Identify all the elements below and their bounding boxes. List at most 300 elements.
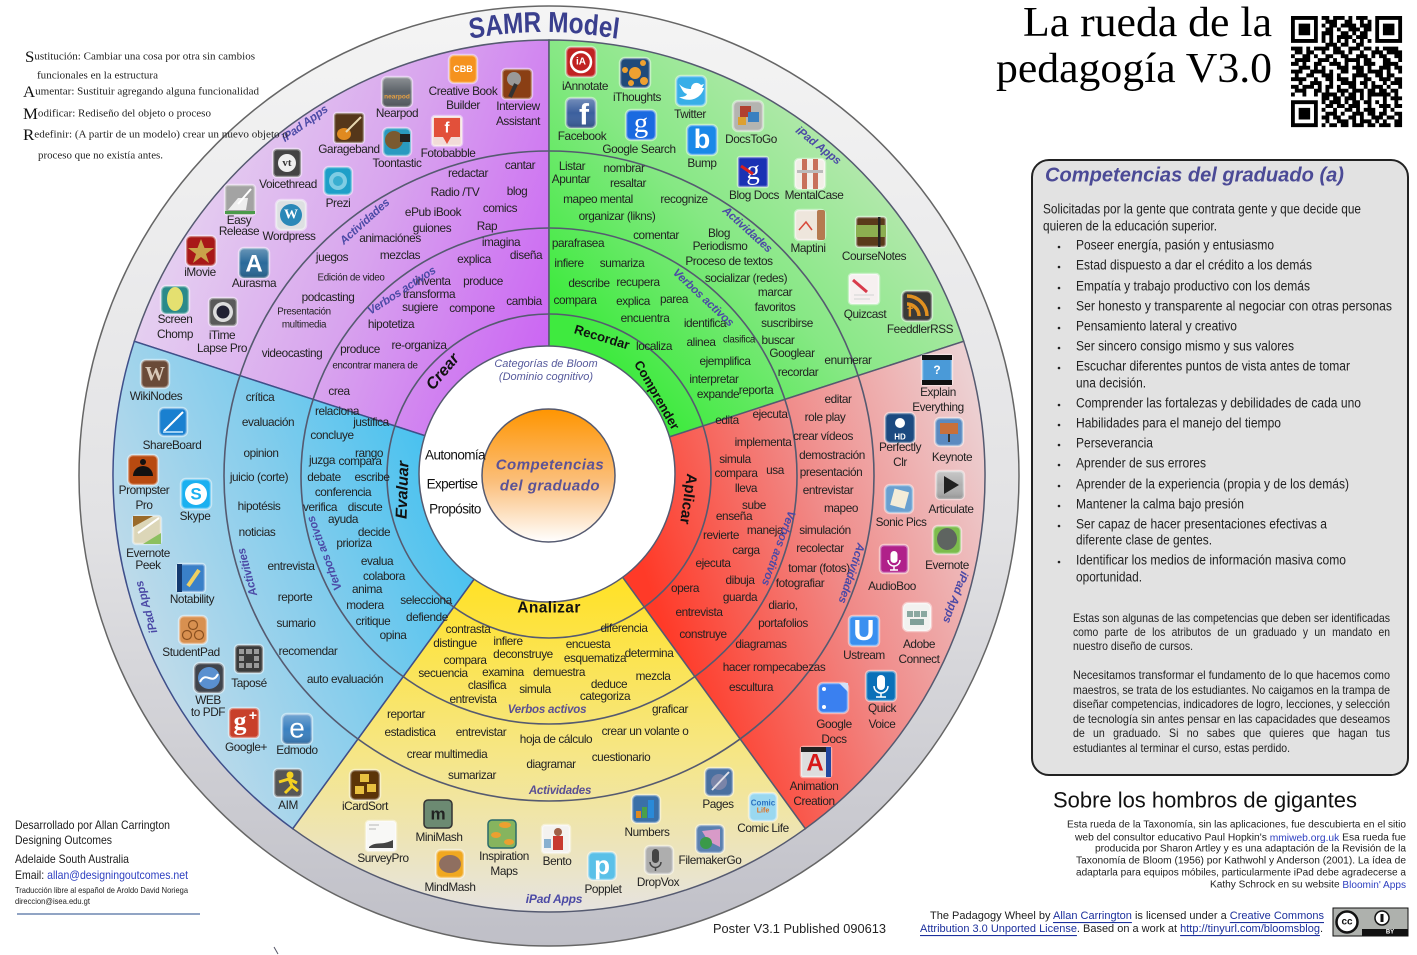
ring labels: green: iPad Apps xyxy=(793,125,843,167)
active verbs: purple: diseña xyxy=(510,248,543,262)
SAMR legend: Modificar: Rediseño del objeto o proceso xyxy=(23,106,211,122)
active verbs: green: sumariza xyxy=(600,256,645,270)
icon: Easy Release: Release xyxy=(219,224,260,238)
activities: green: Googlear xyxy=(769,346,815,360)
active verbs: red: enseña xyxy=(716,509,753,523)
icon: Explain Everything: ? xyxy=(933,363,941,377)
active verbs: yellow: mezcla xyxy=(636,669,671,683)
activities: green: mapeo mental xyxy=(563,192,633,206)
activities: red: diagramas xyxy=(735,637,787,651)
activities: green: comentar xyxy=(633,228,679,242)
competencies bullet list: Ser sincero consigo mismo y sus valores xyxy=(1076,338,1294,354)
wheel xyxy=(78,5,1020,947)
icon: Twitter: Twitter xyxy=(674,107,706,121)
icon: Keynote xyxy=(932,418,973,464)
competencies bullet list: diferente clase de gentes. xyxy=(1076,532,1212,548)
active verbs: red: lleva xyxy=(735,481,758,495)
activities: blue: juicio (corte) xyxy=(229,470,289,484)
icon: Google+: + xyxy=(249,707,257,723)
active verbs: red: entrevista xyxy=(676,605,723,619)
icon: Facebook: Facebook xyxy=(558,129,607,143)
centre words: Autonomía, Expertise, Propósito: Expertise xyxy=(427,476,478,492)
icon: Taposé: Taposé xyxy=(231,676,268,690)
active verbs: red: compara xyxy=(715,466,758,480)
icon: MindMash: MindMash xyxy=(424,880,476,894)
attribution text block: Kathy Schrock en su website Bloomin' Apps xyxy=(1210,880,1406,890)
icon: StudentPad xyxy=(162,616,220,659)
activities: green: suscribirse xyxy=(761,316,814,330)
active verbs: yellow: entrevista xyxy=(450,692,497,706)
attribution text block: web del consultor educativo Paul Hopkin's mmiweb.org.uk Esa rueda fue xyxy=(1074,832,1406,844)
activities: blue: entrevista xyxy=(268,559,315,573)
icon: Popplet xyxy=(584,850,623,896)
active verbs: yellow: contrasta xyxy=(446,622,491,636)
active verbs: yellow: examina xyxy=(482,665,525,679)
bloom categories: Aplicar xyxy=(676,473,700,526)
activities: blue: noticias xyxy=(239,525,276,539)
active verbs: blue: rango xyxy=(355,446,384,460)
activities: yellow: diagramar xyxy=(526,757,576,771)
active verbs: green: recupera xyxy=(616,275,660,289)
activities: blue: reporte xyxy=(278,590,313,604)
active verbs: purple: produce xyxy=(340,342,381,356)
credits block: Designing Outcomes xyxy=(15,833,112,847)
icon: Quick Voice: Voice xyxy=(869,717,896,731)
icon: Ustream: U xyxy=(854,615,874,647)
active verbs: yellow: secuencia xyxy=(418,666,469,680)
icon: Comic Life: Life xyxy=(757,808,769,814)
icon: FilemakerGo: FilemakerGo xyxy=(679,853,742,867)
icon: MentalCase xyxy=(785,159,844,202)
title: pedagogía V3.0 xyxy=(996,46,1272,92)
activities: yellow: estadistica xyxy=(384,725,436,739)
activities: red: entrevistar xyxy=(803,483,854,497)
SAMR legend: Redefinir: (A partir de un modelo) crear un nuevo objeto o xyxy=(23,126,288,144)
active verbs: blue: opina xyxy=(380,628,407,642)
active verbs: red: usa xyxy=(766,463,785,477)
activities: blue: opinion xyxy=(243,446,279,460)
ring labels: blue xyxy=(134,514,345,635)
icon: Facebook xyxy=(558,98,607,143)
white centre disc xyxy=(419,346,675,602)
active verbs: purple: encontrar manera de xyxy=(332,360,418,372)
activities: purple: guiones xyxy=(413,221,452,235)
icon: ScreenChomp: Screen xyxy=(158,312,192,326)
competencies bullet list: Perseverancia xyxy=(1076,436,1153,450)
sector: Analizar (yellow) xyxy=(293,476,805,912)
activities: purple: animaciónes xyxy=(359,231,421,245)
competencies bullet list: Aprender de la experiencia (propia y de los demás) xyxy=(1076,476,1349,492)
activities: yellow: sumarizar xyxy=(448,768,496,782)
icon: Sonic Pics xyxy=(876,485,927,529)
ring labels: blue: Verbos activos xyxy=(305,514,345,592)
icon: Google Search: g xyxy=(634,107,648,139)
active verbs: red: dibuja xyxy=(726,573,755,587)
active verbs: red: sube xyxy=(742,498,767,512)
apps: blue sector xyxy=(119,360,319,812)
icon: Prompster Pro xyxy=(119,455,170,512)
SAMR legend xyxy=(23,48,288,162)
activities: red: portafolios xyxy=(758,616,808,630)
ring title: SAMR Model: SAMR Model xyxy=(470,12,619,39)
active verbs: yellow: esquematiza xyxy=(564,651,627,665)
active verbs: green: compara xyxy=(554,293,597,307)
icon: Perfectly Clr: HD xyxy=(894,432,906,442)
ring labels: blue: Activities xyxy=(236,547,260,598)
ring labels: purple xyxy=(280,103,438,317)
activities: purple: ePub iBook xyxy=(405,205,462,219)
SAMR legend: Sustitución: Cambiar una cosa por otra sin cambios xyxy=(25,48,255,66)
credits block: Desarrollado por Allan Carrington xyxy=(15,818,170,832)
activities: purple: juegos xyxy=(315,250,349,264)
icon: Google+: g xyxy=(234,706,246,736)
active verbs: blue: selecciona xyxy=(400,593,453,607)
active verbs: green: ejemplifica xyxy=(699,354,751,368)
caption: Categorías de Bloom xyxy=(494,358,598,383)
icon: Creative Commons badge: BY xyxy=(1386,930,1394,936)
icon: Evernote xyxy=(925,526,970,572)
icon: DocsToGo xyxy=(725,101,778,146)
competencies bullet list: Empatía y trabajo productivo con los demás xyxy=(1076,278,1310,294)
icon: MiniMash: m xyxy=(430,804,446,824)
icon: Nearpod xyxy=(376,77,418,120)
icon: AIM: AIM xyxy=(278,798,298,812)
icon: MiniMash: MiniMash xyxy=(415,830,463,844)
activities: yellow: entrevistar xyxy=(456,725,507,739)
icon: Quick Voice: Quick xyxy=(868,701,897,715)
sector: Evaluar (blue) xyxy=(113,341,549,829)
attribution text block: adaptarla para equipos móbiles, particularmente iPad debe agradecerse a xyxy=(1076,868,1407,878)
icon: iThoughts: iThoughts xyxy=(613,90,662,104)
caption: Categorías de Bloom: (Dominio cognitivo) xyxy=(499,371,593,383)
panel intro: quieren de la educación superior. xyxy=(1043,218,1217,234)
ring labels: red: Verbos activos xyxy=(759,509,797,587)
competencies bullet list: Estad dispuesto a dar el crédito a los demás xyxy=(1076,258,1312,272)
activities: yellow xyxy=(384,702,689,782)
icon: Garageband xyxy=(318,113,380,156)
icon: Nearpod: Nearpod xyxy=(376,106,418,120)
centre words: Autonomía, Expertise, Propósito xyxy=(425,448,486,516)
activities: red: fotografiar xyxy=(776,576,825,590)
activities: green: nombrar xyxy=(604,161,645,175)
title xyxy=(996,0,1272,92)
ring labels: purple: Actividades xyxy=(337,197,392,248)
activities: green: socializar (redes) xyxy=(705,271,788,285)
active verbs: red: carga xyxy=(732,543,761,557)
core circle: Competencias del graduado: Competencias xyxy=(496,456,604,474)
activities: red: tomar (fotos) xyxy=(788,561,850,575)
icon: Inspiration Maps xyxy=(479,820,529,878)
caption: Categorías de Bloom: Categorías de Bloom xyxy=(494,358,598,370)
license text xyxy=(920,910,1324,935)
competencies bullet list: Identificar los medios de información masiva como xyxy=(1076,552,1346,568)
active verbs: red: revierte xyxy=(703,528,740,542)
active verbs: red: construye xyxy=(679,627,728,641)
icon: Bump: Bump xyxy=(687,156,717,170)
icon: Edmodo: Edmodo xyxy=(276,743,319,757)
icon: StudentPad: StudentPad xyxy=(162,645,220,659)
activities: purple: comics xyxy=(483,201,518,215)
icon: Fotobabble: Fotobabble xyxy=(421,146,476,160)
competencies bullet list: Ser honesto y transparente al negociar con otras personas xyxy=(1076,298,1392,314)
icon: Comic Life: Comic xyxy=(751,798,776,808)
icon: WEB to PDF xyxy=(191,663,225,719)
activities: red: simulación xyxy=(799,523,851,537)
panel paragraph 2: Necesitamos transformar el fundamento de lo que hacemos como xyxy=(1073,668,1390,682)
active verbs: green: identifica xyxy=(684,316,727,330)
active verbs: blue: debate xyxy=(307,470,342,484)
core circle: Competencias del graduado xyxy=(482,409,615,542)
active verbs: purple: sugiere xyxy=(402,300,439,314)
activities: blue: hipotésis xyxy=(238,499,281,513)
icon: Adobe Connect: Adobe xyxy=(903,637,936,651)
license text: Attribution 3.0 Unported License. Based on a work at http://tinyurl.com/bloomsblog. xyxy=(920,923,1323,935)
icon: Facebook: f xyxy=(579,98,590,132)
active verbs: yellow: simula xyxy=(519,682,552,696)
icon: Bump: b xyxy=(694,124,710,154)
credits block: direccion@isea.edu.gt xyxy=(15,896,91,906)
icon: Bento xyxy=(542,825,572,868)
active verbs: blue xyxy=(303,404,453,642)
icon: Aurasma: Aurasma xyxy=(232,276,277,290)
activities: green: Periodismo xyxy=(693,239,748,253)
icon: Interview Assistant: Interview xyxy=(496,99,541,113)
sector: Recordar y Comprender (green) xyxy=(549,40,964,476)
active verbs: purple: transforma xyxy=(403,287,456,301)
icon: WEB to PDF: WEB xyxy=(195,693,221,707)
SAMR legend: funcionales en la estructura xyxy=(37,70,158,82)
icon: FeeddlerRSS: FeeddlerRSS xyxy=(887,322,954,336)
competencies bullet list: Escuchar diferentes puntos de vista antes de tomar xyxy=(1076,358,1350,374)
activities: yellow: reportar xyxy=(387,707,425,721)
icon: Animation Creation: A xyxy=(806,750,824,776)
activities: green: marcar xyxy=(758,285,793,299)
activities: yellow: cuestionario xyxy=(592,750,651,764)
icon: Nearpod: nearpod xyxy=(384,94,410,100)
attribution text block xyxy=(1067,820,1407,890)
active verbs: green: infiere xyxy=(554,256,584,270)
icon: Ustream: Ustream xyxy=(843,648,885,662)
attribution text block: producida por Sharon Artley y es una adaptación de la Revisión de la xyxy=(1095,844,1407,854)
active verbs: purple: produce xyxy=(463,274,504,288)
icon: WEB to PDF: to PDF xyxy=(191,705,225,719)
icon: Easy Release: Easy xyxy=(227,213,252,227)
icon: Articulate xyxy=(929,471,974,516)
bloom categories: Analizar xyxy=(517,600,581,616)
activities: blue: evaluación xyxy=(242,415,294,429)
activities: red: role play xyxy=(805,410,846,424)
active verbs: yellow: compara xyxy=(444,653,487,667)
icon: Explain Everything: Explain xyxy=(920,385,956,399)
panel paragraph 2: diseñar competencias, indicadores de logro, lecciones, y selección xyxy=(1073,697,1390,711)
active verbs: green: expande xyxy=(697,387,740,401)
active verbs: purple xyxy=(328,235,543,398)
icon: ScreenChomp: Chomp xyxy=(157,327,194,341)
heading: Sobre los hombros de gigantes: Sobre los hombros de gigantes xyxy=(1053,788,1357,812)
active verbs: purple: imagina xyxy=(482,235,521,249)
competencies bullet list xyxy=(1058,238,1392,584)
ring boundaries xyxy=(224,151,874,801)
icon: Fotobabble xyxy=(421,116,476,160)
activities: green: Listar xyxy=(559,159,586,173)
activities: purple xyxy=(262,158,536,360)
ring labels: red xyxy=(759,509,970,624)
centre words: Autonomía, Expertise, Propósito: Autonomía xyxy=(425,448,486,462)
panel paragraph 2 xyxy=(1073,668,1390,755)
active verbs: green: encuentra xyxy=(621,311,670,325)
icon: Numbers xyxy=(625,795,670,839)
activities: red xyxy=(723,392,865,694)
credits block: Adelaide South Australia xyxy=(15,852,129,866)
icon: WikiNodes xyxy=(130,360,183,403)
icon: Numbers: Numbers xyxy=(625,825,670,839)
sector: Aplicar (red) xyxy=(549,341,985,829)
icon: Google Search xyxy=(602,107,676,156)
icon: Evernote: Evernote xyxy=(925,558,970,572)
icon: Quizcast: Quizcast xyxy=(844,307,887,321)
active verbs: red: maneja xyxy=(747,523,784,537)
icon: Quick Voice xyxy=(866,671,897,731)
icon: Creative Commons badge: cc xyxy=(1341,916,1353,928)
competencies bullet list: Ser capaz de hacer presentaciones efectivas a xyxy=(1076,516,1327,532)
icon: Perfectly Clr: Clr xyxy=(893,455,907,469)
active verbs: green: interpretar xyxy=(689,372,739,386)
icon: Easy Release xyxy=(219,185,260,238)
icon: Voicethread: Voicethread xyxy=(259,177,317,191)
icon: Comic Life xyxy=(737,793,790,835)
icon: Voicethread xyxy=(259,149,317,191)
active verbs: green: describe xyxy=(568,276,610,290)
active verbs: yellow: demuestra xyxy=(533,665,586,679)
icon: Google Docs: Docs xyxy=(821,732,847,746)
icon: WikiNodes: WikiNodes xyxy=(130,389,183,403)
icon: Creative Book Builder: Creative Book xyxy=(429,84,498,98)
active verbs: yellow: deconstruye xyxy=(493,647,554,661)
activities: purple: Rap xyxy=(477,219,498,233)
bloom categories: Comprender xyxy=(631,358,683,432)
competencies bullet list: Poseer energía, pasión y entusiasmo xyxy=(1076,238,1274,252)
icon: Prezi: Prezi xyxy=(326,196,350,210)
activities: yellow: crear un volante o xyxy=(602,724,689,738)
activities: blue: crítica xyxy=(246,390,275,404)
activities: green: Apuntar xyxy=(552,172,591,186)
icon: iMovie xyxy=(184,236,217,279)
active verbs: blue: prioriza xyxy=(336,536,373,550)
active verbs: red: simula xyxy=(719,452,752,466)
icon: Wordpress: Wordpress xyxy=(262,229,316,243)
icon: Prompster Pro: Prompster xyxy=(119,483,170,497)
competencies bullet list: oportunidad. xyxy=(1076,570,1142,584)
icon: iAnnotate: iA xyxy=(576,56,586,68)
activities: red: crear vídeos xyxy=(793,429,853,443)
icon: Animation Creation: Creation xyxy=(793,794,835,808)
icon: Toontastic: Toontastic xyxy=(373,156,422,170)
active verbs: red: ejecuta xyxy=(752,407,788,421)
active verbs: blue: compara xyxy=(339,454,382,468)
bloom categories: Recordar xyxy=(573,321,631,353)
active verbs: red: opera xyxy=(671,581,700,595)
activities: purple: multimedia xyxy=(282,320,327,330)
active verbs: green: reporta xyxy=(739,383,774,397)
icon: Prompster Pro: Pro xyxy=(135,498,153,512)
icon: Google Docs: Google xyxy=(816,717,853,731)
activities: yellow: graficar xyxy=(652,702,688,716)
icon: Creative Commons badge xyxy=(1333,908,1408,936)
icon: iMovie: iMovie xyxy=(184,265,217,279)
icon: Twitter xyxy=(674,76,706,121)
activities: purple: redactar xyxy=(448,166,488,180)
credits block xyxy=(15,818,200,914)
activities: green: buscar xyxy=(762,333,795,347)
ring labels: green: Verbos activos xyxy=(670,267,736,329)
active verbs: yellow: determina xyxy=(625,646,674,660)
icon: Skype xyxy=(180,479,211,523)
activities: green xyxy=(552,159,872,379)
activities: green: Blog xyxy=(708,226,730,240)
activities: purple: podcasting xyxy=(302,290,354,304)
panel paragraph 2: estudiantes al terminar el curso, estas perdido. xyxy=(1073,741,1290,755)
icon: Articulate: Articulate xyxy=(929,502,974,516)
active verbs: blue: evalua xyxy=(361,554,394,568)
icon: Evernote Peek xyxy=(126,516,171,572)
active verbs: blue: colabora xyxy=(363,569,406,583)
ring labels: yellow: iPad Apps xyxy=(526,892,583,906)
active verbs: green: localiza xyxy=(636,339,673,353)
icon: iAnnotate: iAnnotate xyxy=(562,79,609,93)
icon: Ustream xyxy=(843,615,885,662)
activities: purple: cantar xyxy=(505,158,536,172)
icon: iTime Lapse Pro: Lapse Pro xyxy=(197,341,248,355)
activities: purple: mezclas xyxy=(380,248,421,262)
icon: Popplet: p xyxy=(594,850,610,880)
icon: Keynote: Keynote xyxy=(932,450,973,464)
competencies bullet list: Comprender las fortalezas y debilidades de cada uno xyxy=(1076,396,1361,410)
activities: red: editar xyxy=(824,392,852,406)
apps: red sector xyxy=(790,355,974,808)
icon: AudioBoo: AudioBoo xyxy=(868,579,917,593)
activities: yellow: hoja de cálculo xyxy=(520,732,593,746)
icon: Wordpress xyxy=(262,200,316,243)
activities: blue: recomendar xyxy=(279,644,338,658)
active verbs: blue: escribe xyxy=(354,470,390,484)
active verbs: blue: defiende xyxy=(406,610,449,624)
active verbs: blue: decide xyxy=(358,525,391,539)
bloom categories xyxy=(393,321,700,616)
active verbs: yellow: categoriza xyxy=(580,689,631,703)
activities: blue xyxy=(229,390,383,686)
ring labels: yellow xyxy=(508,704,591,906)
active verbs: green: parafrasea xyxy=(552,236,605,250)
panel intro xyxy=(1043,202,1361,234)
icon: MiniMash xyxy=(415,800,463,844)
active verbs: blue: anima xyxy=(352,582,383,596)
active verbs: blue: modera xyxy=(346,598,385,612)
icon: Pages xyxy=(702,768,734,811)
icon: Quizcast xyxy=(844,274,887,321)
panel paragraph 1: nuestro diseño de cursos. xyxy=(1073,639,1193,653)
icon: Skype: S xyxy=(190,484,202,504)
ring labels: green: Actividades xyxy=(719,204,774,255)
activities: red: escultura xyxy=(729,680,774,694)
icon: Blog Docs: Blog Docs xyxy=(729,188,780,202)
active verbs: purple: hipotetiza xyxy=(368,317,415,331)
activities: red: mapeo xyxy=(824,501,859,515)
icon: SurveyPro: SurveyPro xyxy=(357,851,410,865)
active verbs: blue: relaciona xyxy=(315,404,360,418)
icon: Prezi xyxy=(324,167,352,210)
icon: iThoughts xyxy=(613,58,662,104)
icon: Notability xyxy=(170,564,215,606)
